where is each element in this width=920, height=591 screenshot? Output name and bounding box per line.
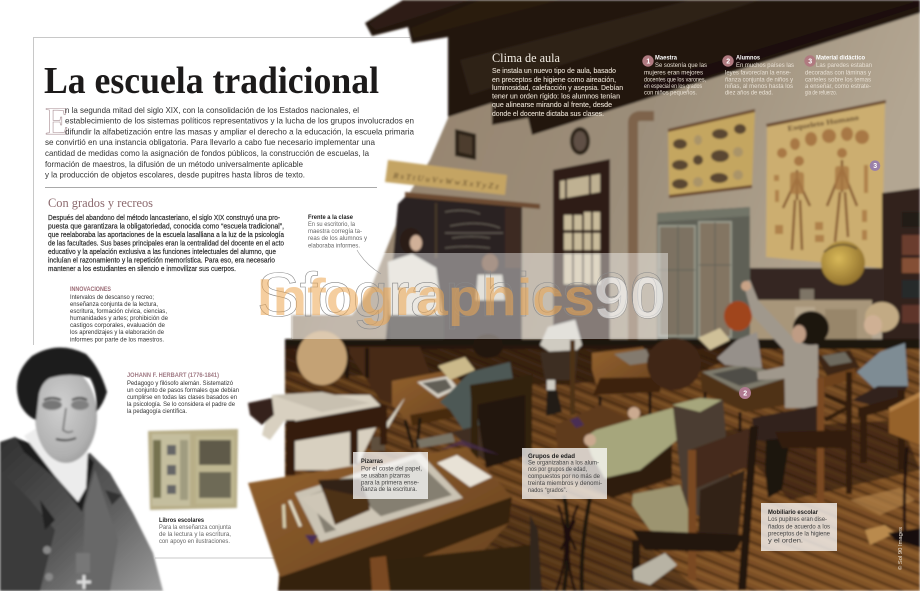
student with green jacket xyxy=(440,334,514,465)
icon: number badge 2: 2 xyxy=(726,58,730,66)
marker 2 on desk xyxy=(739,387,751,399)
caption: libros escolares xyxy=(159,517,231,545)
biography: Herbart: un conjunto de pasos formales que debían xyxy=(127,387,239,394)
credit: © Sol 90 Images xyxy=(897,527,904,570)
callout: mobiliario escolar xyxy=(761,503,837,551)
desk: mid right xyxy=(700,362,792,437)
icon: number badge 1: 1 xyxy=(646,58,650,66)
callout: pizarras: se usaban pizarras xyxy=(361,472,410,479)
watermark panel xyxy=(257,253,668,339)
school book photo xyxy=(148,429,238,510)
note 2: alumnos: Alumnos xyxy=(736,54,760,62)
panel outline xyxy=(34,38,410,558)
callout: innovaciones: los aprendizajes y la elaboración de xyxy=(70,329,164,336)
callout: grupos de edad: nados “grados”. xyxy=(528,487,567,494)
note 1: maestra: mujeres eran mejores xyxy=(644,69,703,76)
callout: mobiliario escolar: ñados de acuerdo a los xyxy=(768,523,830,530)
callout: innovaciones: informes por parte de los maestros. xyxy=(70,336,164,344)
callout: frente a la clase: Frente a la clase xyxy=(308,214,353,221)
chair: far right xyxy=(858,390,905,470)
drop cap: E xyxy=(45,100,69,143)
marker 3 on chart xyxy=(870,160,880,171)
caption: libros escolares: de la lectura y la escritura, xyxy=(159,531,231,538)
marker 3 on chart: 3 xyxy=(873,163,877,170)
note 1: maestra: docentes que los varones, xyxy=(644,76,706,83)
callout: innovaciones: castigos corporales, evaluación de xyxy=(70,322,165,329)
intro text: y la producción de objetos escolares, desde pupitres hasta libros de texto. xyxy=(45,171,305,180)
note 2: alumnos: diez años de edad. xyxy=(725,90,773,97)
biography: Herbart xyxy=(127,373,239,415)
note 3: material didactico: carteles sobre los temas xyxy=(805,76,871,83)
desk: front left with slate, books and paper xyxy=(248,440,512,591)
callout: pizarras xyxy=(353,452,428,499)
student in green shirt xyxy=(584,338,730,545)
callout: mobiliario escolar: Los pupitres eran dise- xyxy=(768,516,827,523)
note 1: maestra xyxy=(642,54,707,97)
quill and inkwell xyxy=(371,398,405,451)
globe xyxy=(821,241,865,285)
panel: clima de aula: Se instala un nuevo tipo de aula, basado xyxy=(492,66,616,75)
callout: mobiliario escolar: y el orden. xyxy=(768,537,803,544)
panel: clima de aula: Clima de aula xyxy=(492,50,560,65)
callout: grupos de edad xyxy=(522,448,607,499)
panel: clima de aula: luminosidad, calefacción y asepsia. Debían xyxy=(492,83,623,92)
floor xyxy=(278,339,920,591)
biography: Herbart: cumplirse en todas las clases basados en xyxy=(127,394,237,401)
note 1: maestra: en especial en los grados xyxy=(644,83,702,90)
icon: number badge 3: 3 xyxy=(808,58,812,66)
pipe xyxy=(633,116,654,340)
callout: innovaciones: escritura, formación cívica, ciencias, xyxy=(70,308,167,315)
watermark orange text: Infographics xyxy=(257,269,595,327)
intro text: difundir la alfabetización entre las masas y ampliar el derecho a la educación, la escuela primaria xyxy=(65,127,414,136)
section body text: Después del abandono del método lancasteriano, el siglo XIX construyó una pro- xyxy=(48,213,280,222)
note 3: material didactico xyxy=(804,54,873,97)
biography: Herbart: Pedagogo y filósofo alemán. Sistematizó xyxy=(127,380,233,387)
desk: back middle xyxy=(592,347,662,426)
callout: grupos de edad: treinta miembros y denomi- xyxy=(528,480,602,487)
blond student xyxy=(817,302,908,405)
panel: clima de aula: donde el docente dictaba sus clases. xyxy=(492,109,604,118)
biography: Herbart: JOHANN F. HERBART (1776-1841) xyxy=(127,373,219,379)
note 3: material didactico: decoradas con láminas y xyxy=(805,69,872,76)
callout: frente a la clase: En su escritorio, la xyxy=(308,221,355,228)
note 2: alumnos: niñas, al menos hasta los xyxy=(725,83,793,90)
teacher xyxy=(388,228,444,382)
caption: libros escolares: Libros escolares xyxy=(159,517,204,524)
student at blackboard xyxy=(476,254,505,300)
note 3: material didactico: Material didáctico xyxy=(816,54,865,62)
intro text: se convirtió en una instancia obligatoria. Para llevarlo a cabo fue necesario implementar una xyxy=(45,138,375,147)
section body text: de las facultades. Sus bases principales eran la centralidad del docente en el acto xyxy=(48,238,284,248)
section body text: que reelaboraba las aportaciones de la escuela lasalliana a la luz de la psicología xyxy=(48,230,285,239)
callout: innovaciones: enseñanza conjunta de la lectura, xyxy=(70,301,158,308)
section body text xyxy=(48,213,285,273)
panel: clima de aula: en preceptos de higiene como aireación, xyxy=(492,75,616,84)
biography: Herbart: la psicología. Se lo considera el padre de xyxy=(127,401,235,408)
portrait: Johann F. Herbart xyxy=(0,347,163,591)
classroom scene xyxy=(248,0,920,591)
section heading: Con grados y recreos xyxy=(48,196,153,210)
chair: green shirt student xyxy=(632,426,758,590)
panel: clima de aula: tener un orden rígido: los alumnos tenían xyxy=(492,91,620,100)
cabinet xyxy=(657,207,750,345)
intro text: formación de maestros, la difusión de un método universalmente aplicable xyxy=(45,160,303,169)
iron desk leg xyxy=(556,505,578,591)
alphabet board: R s T t U u V v W w X x Y y Z z xyxy=(392,171,500,191)
note 1: maestra: Maestra xyxy=(655,54,678,62)
back left student xyxy=(540,320,582,416)
section body text: puesta que garantizara la obligatoriedad, conocida como “escuela tradicional”, xyxy=(48,222,284,230)
blonde student front xyxy=(248,331,387,475)
student raising hand xyxy=(741,280,829,498)
callout: frente a la clase: reas de los alumnos y xyxy=(308,235,368,242)
caption: libros escolares: con apoyo en ilustraciones. xyxy=(159,538,230,545)
note 2: alumnos: En muchos países las xyxy=(736,62,794,69)
desk: front middle xyxy=(555,405,672,591)
picture frame xyxy=(455,129,476,160)
note 1: maestra: Se sostenía que las xyxy=(655,62,707,69)
callout: innovaciones: humanidades y artes; prohibición de xyxy=(70,315,168,322)
intro text: n la segunda mitad del siglo XIX, con la consolidación de los Estados nacionales, el xyxy=(65,106,359,115)
callout: mobiliario escolar: preceptos de la higiene xyxy=(768,530,830,538)
callout: grupos de edad: Grupos de edad xyxy=(528,453,575,460)
callout: mobiliario escolar: Mobiliario escolar xyxy=(768,509,819,516)
watermark number: 90 xyxy=(594,266,666,331)
chair: raised-hand student xyxy=(775,368,856,503)
skeleton chart: Esqueleto Humano xyxy=(787,113,860,133)
desk with slate: middle left xyxy=(392,357,480,448)
section body text: mantener a los estudiantes en silencio e inmovilizar sus cuerpos. xyxy=(48,264,236,273)
blackboard xyxy=(385,192,540,345)
section body text: educativo y la apelación exclusiva a las funciones intelectuales del alumno, que xyxy=(48,247,276,256)
callout: innovaciones: Intervalos de descanso y recreo; xyxy=(70,294,154,301)
desk: right edge xyxy=(888,392,920,548)
callout: grupos de edad: nos por grupos de edad, xyxy=(528,466,587,473)
note 3: material didactico: gia de refuerzo. xyxy=(805,90,837,97)
callout: pizarras: ñanza de la escritura. xyxy=(361,486,417,493)
biography: Herbart: la pedagogía científica. xyxy=(127,408,187,415)
note 3: material didactico: a enseñar, como estrate- xyxy=(805,83,871,90)
intro text xyxy=(45,106,414,180)
note 2: alumnos: ñanza conjunta de niños y xyxy=(725,76,794,83)
wall xyxy=(292,10,920,345)
butterfly chart xyxy=(668,109,755,198)
callout: frente a la clase: elaboraba informes. xyxy=(308,242,360,250)
panel: clima de aula: que alinearse mirando al frente, desde xyxy=(492,100,612,109)
callout: innovaciones xyxy=(70,287,168,344)
callout: grupos de edad: Se organizaban a los alum- xyxy=(528,460,599,466)
note 1: maestra: con niños pequeños. xyxy=(644,90,697,97)
callout: innovaciones: INNOVACIONES xyxy=(70,287,111,293)
callout: frente a la clase: maestra corregía ta- xyxy=(308,228,362,235)
watermark outline text: Sfographics90 xyxy=(257,261,665,330)
wall clock xyxy=(570,127,590,155)
bookcase xyxy=(882,188,920,345)
ceiling and beams xyxy=(365,0,920,135)
redhead student xyxy=(698,301,762,368)
wainscot and sideboard xyxy=(738,268,884,345)
intro text: cantidad de medidas como la asignación de fondos públicos, la construcción de escuelas, la xyxy=(45,149,369,158)
books on floor xyxy=(633,553,677,585)
callout: pizarras: Pizarras xyxy=(361,458,383,465)
section body text: incluían el razonamiento y la repetición memorística. Para eso, era necesario xyxy=(48,256,275,265)
callout: pizarras: para la primera ense- xyxy=(361,480,419,486)
door with windows xyxy=(553,159,610,345)
chair: front xyxy=(370,515,542,591)
marker 2 on desk: 2 xyxy=(743,390,747,398)
intro text: establecimiento de los sistemas políticos representativos y la lucha de los grupos involucrados en xyxy=(65,117,414,126)
note 2: alumnos: leyes favorecían la ense- xyxy=(725,69,791,76)
skeleton chart xyxy=(766,100,886,268)
callout: pizarras: Por el coste del papel, xyxy=(361,466,422,472)
note 3: material didactico: Las paredes estaban xyxy=(816,62,873,69)
divider xyxy=(45,187,377,188)
title: La escuela tradicional xyxy=(44,60,379,102)
alphabet board xyxy=(385,160,507,195)
chair: middle student xyxy=(470,375,533,468)
panel: clima de aula xyxy=(492,50,623,118)
note 2: alumnos xyxy=(722,54,794,97)
callout: grupos de edad: compuestos por no más de xyxy=(528,473,600,480)
caption: libros escolares: Para la enseñanza conjunta xyxy=(159,524,231,531)
callout: frente a la clase xyxy=(308,214,381,274)
